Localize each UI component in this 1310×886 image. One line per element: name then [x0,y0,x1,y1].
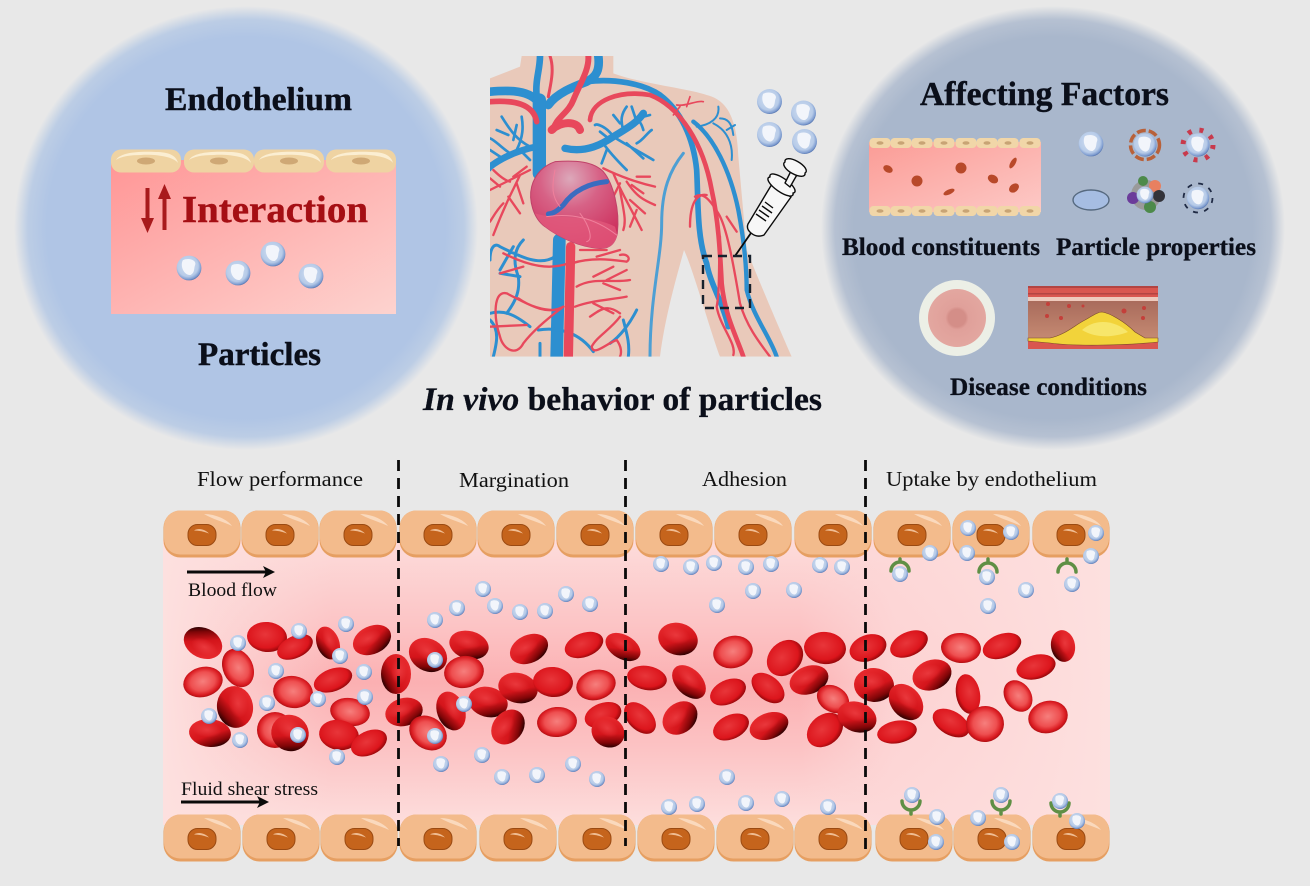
endothelial cells [111,150,396,172]
particles in box [177,242,323,288]
label: Fluid shear stress: Fluid shear stress [181,779,318,800]
endothelial cells: top row [164,510,1110,558]
heading: Endothelium: Endothelium [165,82,352,118]
icon: syringe [735,159,806,256]
label: Particle properties: Particle properties [1056,234,1256,261]
icon: interaction arrows [141,184,171,233]
label: Blood constituents: Blood constituents [842,234,1040,261]
icon: blood constituents vessel [869,138,1041,216]
icon: particle sphere [1079,132,1103,156]
caption: In vivo behavior of particles: In vivo behavior of particles [422,382,822,418]
panel: affecting factors [821,6,1285,450]
icon: particle with red ligands [1183,130,1213,160]
red blood cells [179,618,1078,762]
icon: particle with protein corona [1127,176,1165,213]
stage dividers [398,460,866,850]
heading: Particles: Particles [198,337,321,373]
vessel box with interaction [111,150,396,314]
icon: disc particle [1073,190,1109,210]
icon: atherosclerotic plaque [1028,286,1158,349]
label: Disease conditions: Disease conditions [950,374,1147,401]
arrow: blood flow [187,566,275,578]
stage label: Uptake by endothelium: Uptake by endothelium [886,467,1097,491]
icon: four particles [757,89,817,154]
particles [201,520,1104,850]
icon: particle with brown coating [1130,130,1160,160]
stage label: Flow performance: Flow performance [197,467,363,491]
heading: Affecting Factors: Affecting Factors [920,76,1169,113]
panel: endothelium and particles [14,6,478,450]
icon: particle with dark ligands [1184,184,1212,212]
panel: circulation illustration [422,56,822,418]
stage label: Margination: Margination [459,468,570,492]
label: Interaction: Interaction [182,189,368,231]
arrow: fluid shear stress [181,796,269,808]
vessel lumen [163,540,1110,825]
icon: dashed injection site box [703,256,750,308]
icon: cross-section of tumour [919,280,995,356]
label: Blood flow: Blood flow [188,580,277,601]
body with blood vessels [490,56,792,357]
receptors on endothelium [891,559,1076,816]
stage label: Adhesion: Adhesion [702,467,788,491]
panel: blood vessel stages [163,460,1110,862]
endothelial cells: bottom row [164,814,1110,862]
